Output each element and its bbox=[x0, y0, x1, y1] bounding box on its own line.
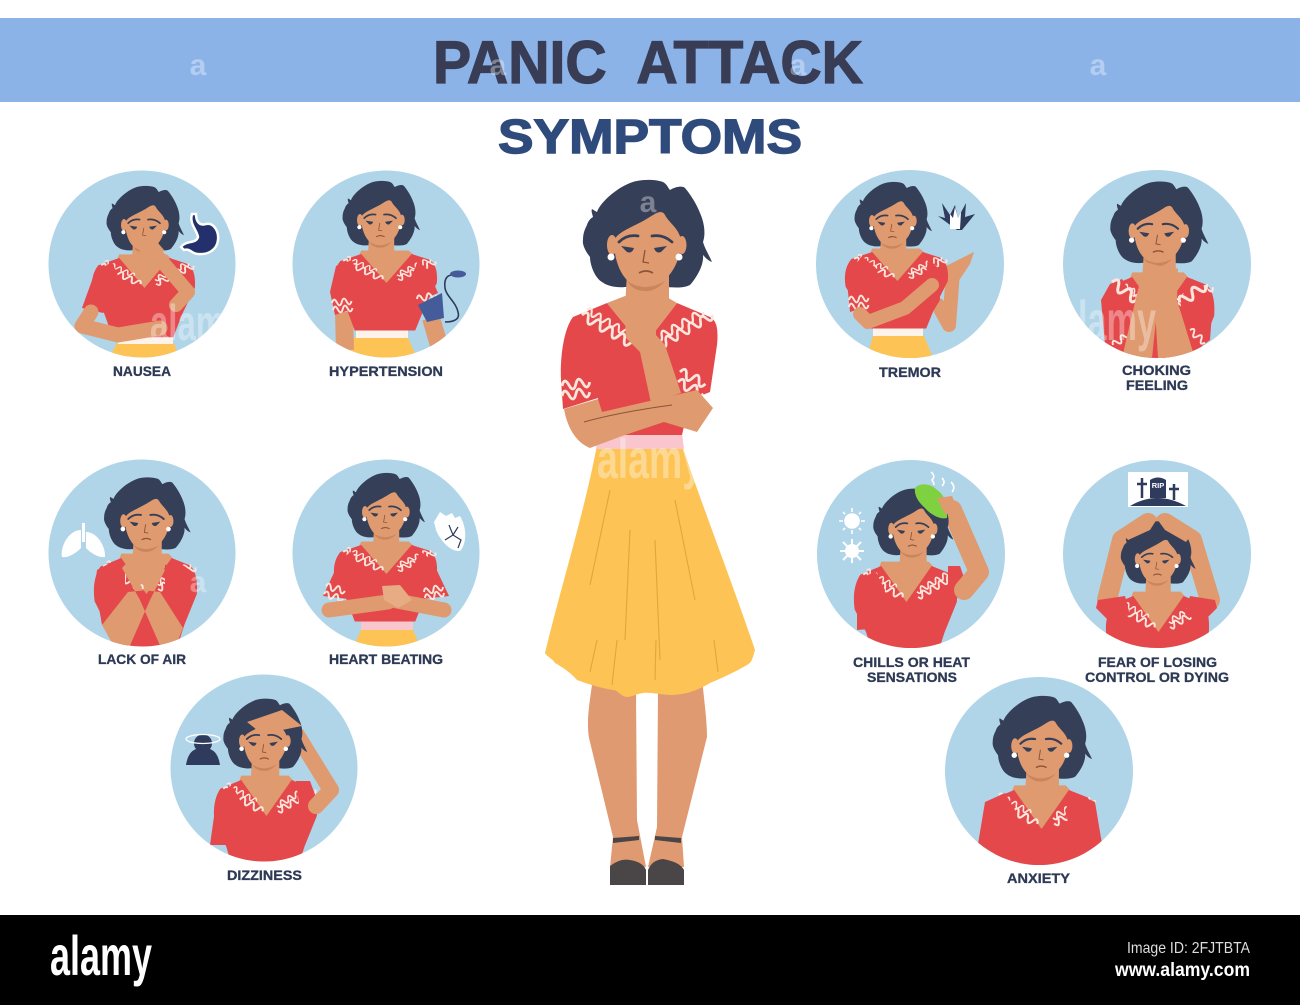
label: CONTROL OR DYING bbox=[1085, 669, 1229, 685]
sleeve waves bbox=[323, 583, 445, 602]
label bbox=[1085, 654, 1229, 685]
icon: hot water bottle bbox=[915, 484, 947, 518]
panel: hypertension bbox=[292, 170, 480, 379]
blouse bbox=[854, 562, 957, 661]
crossed arm bbox=[564, 390, 713, 448]
label: TREMOR bbox=[879, 364, 941, 380]
arms bbox=[344, 312, 441, 352]
head bbox=[104, 477, 191, 563]
central figure bbox=[545, 180, 755, 885]
banner watermark letters bbox=[190, 49, 1107, 82]
panel: dizziness bbox=[170, 674, 358, 883]
label bbox=[1122, 362, 1191, 393]
panel: choking feeling bbox=[1063, 170, 1251, 393]
icon: stomach bbox=[181, 214, 218, 254]
head bbox=[993, 696, 1092, 794]
head bbox=[107, 186, 184, 262]
arms bbox=[329, 600, 444, 610]
head bbox=[855, 182, 932, 258]
footer logo: alamy bbox=[50, 924, 152, 987]
head bbox=[873, 489, 953, 567]
icon: snowflake bbox=[840, 539, 864, 563]
icon: heat waves bbox=[931, 472, 954, 492]
label: HYPERTENSION bbox=[329, 363, 443, 379]
panel: tremor bbox=[816, 170, 1004, 380]
skirt bbox=[869, 336, 932, 358]
label: SENSATIONS bbox=[867, 669, 957, 685]
raised arm bbox=[938, 272, 953, 325]
shoes bbox=[610, 836, 684, 885]
blouse bbox=[334, 251, 437, 331]
blouse bbox=[92, 254, 195, 337]
head bbox=[1121, 521, 1196, 595]
icon: lungs bbox=[62, 523, 105, 557]
image id: Image ID: 2FJTBTA bbox=[1127, 940, 1250, 957]
blouse bbox=[1106, 592, 1209, 691]
label: CHOKING bbox=[1122, 362, 1191, 378]
banner watermark letters: a bbox=[790, 49, 807, 82]
hand over mouth bbox=[139, 240, 164, 252]
arms bbox=[1107, 523, 1210, 600]
open hand bbox=[946, 252, 974, 280]
skirt bbox=[545, 445, 755, 697]
crossing arm bbox=[860, 285, 932, 322]
watermark: lamy bbox=[1078, 289, 1156, 352]
skirt bbox=[356, 630, 418, 646]
waistband bbox=[361, 622, 413, 630]
label: FEELING bbox=[1126, 377, 1188, 393]
hair and face bbox=[583, 180, 712, 307]
blouse bbox=[94, 554, 197, 653]
figure watermarks bbox=[597, 186, 703, 490]
blouse bbox=[845, 249, 948, 329]
sleeve waves bbox=[332, 292, 437, 313]
icon: blood pressure cuff bbox=[418, 270, 466, 322]
label: CHILLS OR HEAT bbox=[853, 654, 970, 670]
crossed arms at throat bbox=[1122, 262, 1193, 358]
label: HEART BEATING bbox=[329, 651, 443, 667]
hand on forehead bbox=[247, 710, 302, 730]
arms bbox=[82, 312, 160, 335]
head bbox=[348, 473, 425, 549]
head bbox=[1110, 181, 1208, 278]
panel: anxiety bbox=[945, 677, 1133, 893]
hand on bottle bbox=[937, 496, 959, 514]
watermark: a bbox=[190, 566, 207, 599]
raised arm bbox=[952, 510, 979, 590]
panel: fear of dying bbox=[1063, 460, 1251, 691]
label: ANXIETY bbox=[1007, 870, 1071, 886]
raised arm bbox=[300, 728, 339, 814]
skirt bbox=[349, 338, 415, 358]
waistband bbox=[596, 433, 684, 449]
heading: symptoms: SYMPTOMS bbox=[498, 111, 802, 164]
skirt bbox=[112, 343, 177, 358]
blouse bbox=[334, 542, 437, 622]
label bbox=[853, 654, 970, 685]
blouse bbox=[561, 303, 718, 435]
icon: shaking hands bbox=[938, 203, 975, 230]
label: DIZZINESS bbox=[227, 867, 302, 883]
arms bbox=[102, 564, 183, 646]
waistband bbox=[873, 328, 923, 336]
panel: nausea bbox=[48, 170, 236, 379]
panel: lack of air bbox=[48, 460, 236, 667]
icon: graves bbox=[1128, 472, 1188, 507]
raised arm and hand bbox=[625, 302, 681, 403]
blouse bbox=[1103, 272, 1214, 380]
blouse bbox=[985, 785, 1096, 893]
waistband bbox=[356, 330, 408, 338]
head bbox=[223, 699, 307, 781]
website: www.alamy.com bbox=[1114, 960, 1250, 981]
waistband bbox=[118, 337, 173, 344]
label: LACK OF AIR bbox=[98, 651, 186, 667]
legs bbox=[588, 678, 707, 867]
icon: graves: RIP bbox=[1152, 481, 1164, 490]
head bbox=[343, 181, 420, 257]
watermark: alam bbox=[150, 295, 225, 351]
banner watermark letters: a bbox=[190, 49, 207, 82]
icon: heart bbox=[434, 512, 465, 551]
panel: heart beating bbox=[292, 460, 480, 667]
figure watermarks: alamy bbox=[597, 427, 703, 490]
icon: sun bbox=[839, 508, 865, 534]
header banner bbox=[0, 18, 1300, 102]
panel: chills or heat bbox=[817, 460, 1005, 685]
sleeve waves bbox=[849, 295, 869, 310]
hand bbox=[382, 585, 412, 608]
label: NAUSEA bbox=[113, 363, 171, 379]
blouse bbox=[214, 776, 317, 862]
footer bar bbox=[0, 915, 1300, 1005]
hands on head bbox=[1122, 519, 1192, 542]
title: PANIC ATTACK bbox=[433, 29, 863, 96]
banner watermark letters: a bbox=[1090, 49, 1107, 82]
label: FEAR OF LOSING bbox=[1098, 654, 1217, 670]
sleeve waves bbox=[1109, 278, 1208, 348]
banner watermark letters: a bbox=[490, 49, 507, 82]
blouse waves bbox=[561, 307, 714, 400]
icon: dizzy head bbox=[186, 734, 220, 765]
figure watermarks: a bbox=[640, 186, 657, 219]
